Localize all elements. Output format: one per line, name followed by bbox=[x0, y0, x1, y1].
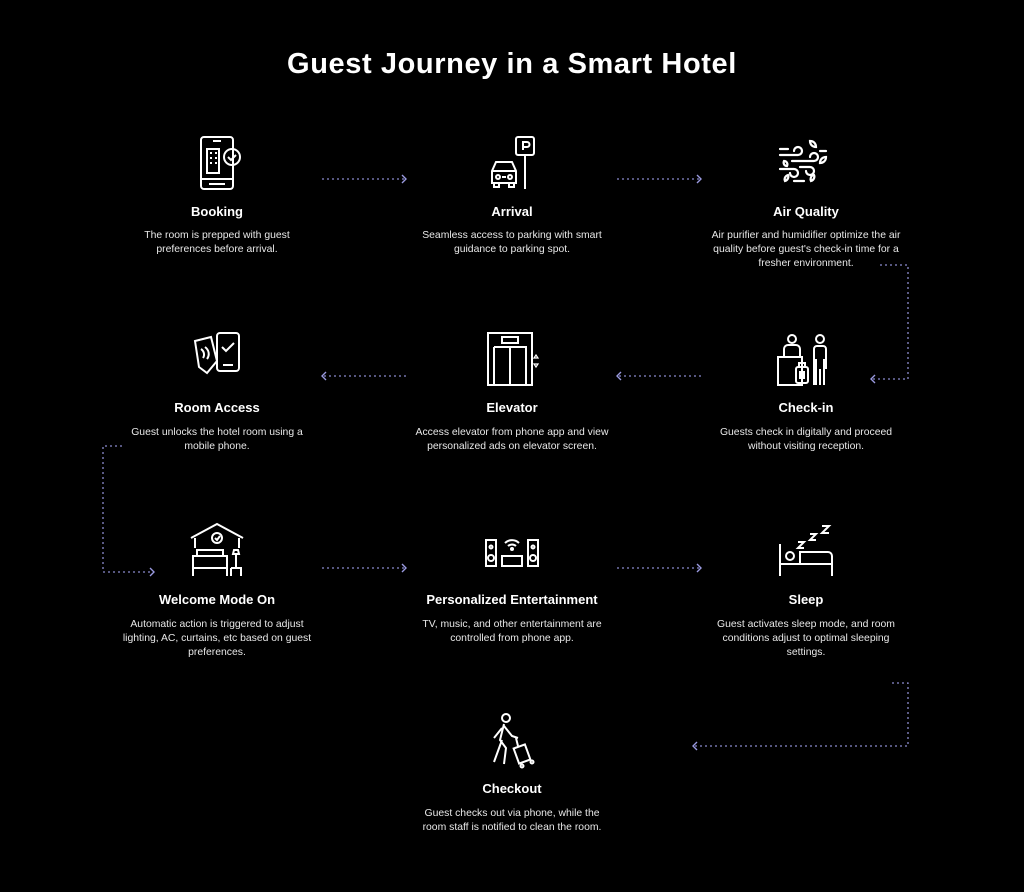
icon: traveler bbox=[493, 713, 534, 768]
step: entertainment: Personalized Entertainment bbox=[426, 592, 598, 607]
icon: elevator bbox=[487, 332, 540, 386]
step: room access: Guest unlocks the hotel room using a bbox=[131, 427, 303, 438]
step: elevator bbox=[416, 332, 608, 452]
step: air quality bbox=[712, 140, 900, 269]
icon: house bed bbox=[190, 522, 244, 576]
step: checkout: Checkout bbox=[482, 781, 542, 796]
step: checkout bbox=[423, 713, 601, 833]
step: sleep bbox=[717, 525, 895, 658]
step: arrival: guidance to parking spot. bbox=[454, 244, 570, 255]
step: checkout: Guest checks out via phone, while the bbox=[424, 808, 600, 819]
step: check-in: Guests check in digitally and proceed bbox=[720, 427, 892, 438]
step: entertainment: TV, music, and other entertainment are bbox=[422, 619, 602, 630]
icon: bed zzz bbox=[779, 525, 833, 576]
step: sleep: conditions adjust to optimal sleeping bbox=[723, 633, 889, 644]
icon: phone booking bbox=[200, 136, 241, 190]
step: air quality: fresher environment. bbox=[758, 258, 854, 269]
step: booking bbox=[144, 136, 290, 255]
icon: speakers bbox=[485, 539, 539, 567]
step: elevator: Access elevator from phone app and view bbox=[416, 427, 608, 438]
step: welcome mode: preferences. bbox=[188, 647, 246, 658]
step: room access bbox=[131, 332, 303, 452]
step: room access: mobile phone. bbox=[184, 441, 250, 452]
title: Guest Journey in a Smart Hotel bbox=[287, 48, 737, 80]
step: elevator: Elevator bbox=[486, 400, 538, 415]
step: check-in bbox=[720, 334, 892, 452]
step: check-in: Check-in bbox=[779, 400, 833, 415]
step: booking: The room is prepped with guest bbox=[144, 230, 290, 241]
step: check-in: without visiting reception. bbox=[748, 441, 864, 452]
step: welcome mode: Automatic action is triggered to adjust bbox=[130, 619, 304, 630]
step: sleep: Sleep bbox=[789, 592, 823, 607]
step: sleep: settings. bbox=[787, 647, 825, 658]
step: entertainment bbox=[422, 539, 602, 644]
step: arrival bbox=[422, 136, 602, 255]
icon: reception bbox=[777, 334, 827, 386]
icon: hand phone bbox=[194, 332, 240, 374]
icon: wind leaves bbox=[778, 140, 828, 182]
step: welcome mode: lighting, AC, curtains, etc based on guest bbox=[123, 633, 311, 644]
step: entertainment: controlled from phone app. bbox=[450, 633, 574, 644]
step: arrival: Arrival bbox=[491, 204, 533, 219]
step: air quality: quality before guest's check-in time for a bbox=[713, 244, 899, 255]
step: air quality: Air purifier and humidifier optimize the air bbox=[712, 230, 900, 241]
icon: car parking bbox=[491, 136, 535, 189]
step: checkout: room staff is notified to clean the room. bbox=[423, 822, 601, 833]
step: welcome mode: Welcome Mode On bbox=[159, 592, 275, 607]
step: booking: Booking bbox=[191, 204, 243, 219]
step: arrival: Seamless access to parking with smart bbox=[422, 230, 602, 241]
step: sleep: Guest activates sleep mode, and room bbox=[717, 619, 895, 630]
step: elevator: personalized ads on elevator screen. bbox=[427, 441, 597, 452]
step: welcome mode bbox=[123, 522, 312, 658]
step: room access: Room Access bbox=[174, 400, 260, 415]
step: booking: preferences before arrival. bbox=[156, 244, 278, 255]
step: air quality: Air Quality bbox=[773, 204, 839, 219]
